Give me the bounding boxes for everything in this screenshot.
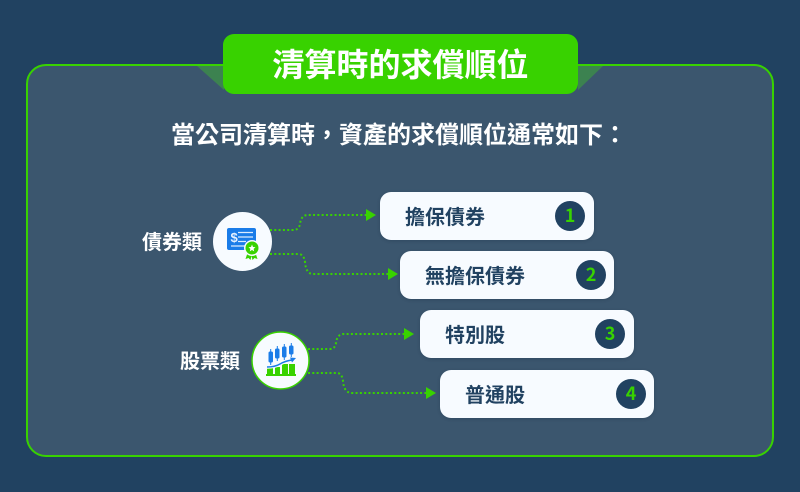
card: common stock xyxy=(440,370,654,418)
icon: stock chart xyxy=(251,331,310,390)
subtitle: 當公司清算時，資產的求償順位通常如下： xyxy=(171,122,627,149)
card: secured bonds: 1 xyxy=(565,202,575,228)
card: preferred stock: 3 xyxy=(605,320,615,346)
icon: bond certificate: $ xyxy=(230,230,238,245)
card: preferred stock xyxy=(420,310,634,358)
card: preferred stock: 特別股 xyxy=(445,325,505,347)
card: unsecured bonds: 無擔保債券 xyxy=(425,266,525,288)
card: unsecured bonds xyxy=(400,251,614,299)
card: secured bonds: 擔保債券 xyxy=(405,207,485,229)
title banner: 清算時的求償順位 xyxy=(272,47,528,83)
card: secured bonds xyxy=(380,192,594,240)
label: stocks: 股票類 xyxy=(180,351,240,373)
title banner xyxy=(223,34,578,94)
title ribbon folds xyxy=(197,66,603,90)
panel: main frame xyxy=(26,64,774,457)
card: unsecured bonds: 2 xyxy=(586,261,596,287)
card: common stock: 4 xyxy=(626,380,636,406)
card: common stock: 普通股 xyxy=(465,385,525,407)
label: bonds: 債券類 xyxy=(142,232,202,254)
icon: bond certificate xyxy=(213,212,272,271)
